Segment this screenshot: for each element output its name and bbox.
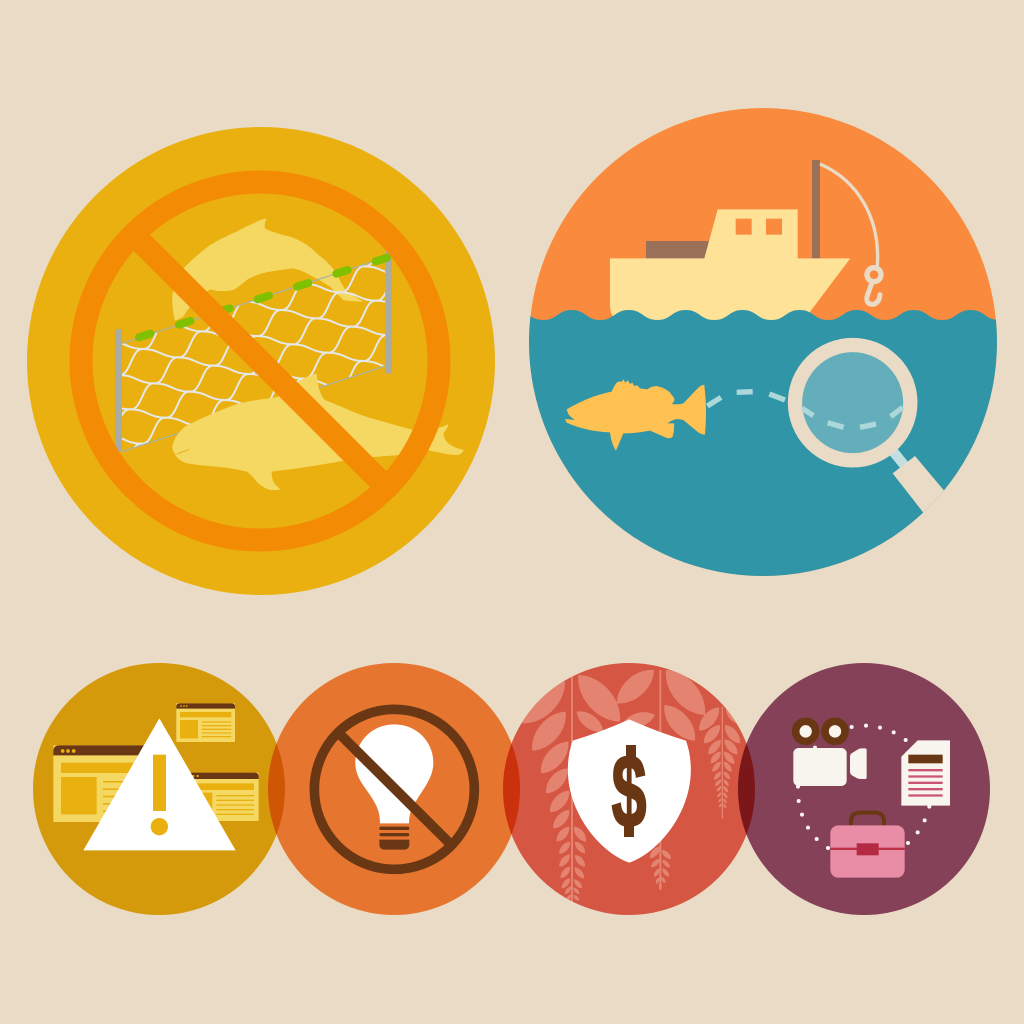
window body bbox=[176, 703, 235, 742]
film reel left bbox=[796, 721, 816, 741]
camera body bbox=[793, 748, 847, 786]
ochre disc bbox=[33, 663, 285, 915]
right post bbox=[385, 250, 392, 373]
prohibition ring bbox=[81, 182, 439, 540]
icon: fish bbox=[565, 379, 706, 451]
panel: financial protection bbox=[503, 663, 746, 915]
orange disc bbox=[268, 663, 520, 915]
window contents bbox=[180, 712, 231, 738]
red disc bbox=[503, 663, 755, 915]
gold disc bbox=[27, 127, 495, 595]
base thread 1 bbox=[379, 827, 409, 830]
cabin window left bbox=[736, 219, 752, 235]
icon: top browser window bbox=[176, 703, 235, 742]
film reel right bbox=[825, 721, 845, 741]
page lines bbox=[908, 769, 943, 797]
icon: exclamation mark bbox=[151, 755, 168, 835]
window contents bbox=[190, 783, 254, 816]
panel: no ideas bbox=[268, 663, 520, 915]
mast bbox=[812, 160, 820, 259]
dolphin mouth line bbox=[177, 450, 189, 454]
clasp bbox=[857, 843, 879, 855]
dollar top bar bbox=[626, 745, 636, 758]
net mesh left bbox=[122, 326, 275, 448]
window contents bbox=[61, 763, 143, 814]
hook eye bbox=[867, 268, 881, 282]
exclamation bar bbox=[153, 755, 166, 811]
icon: lower dolphin bbox=[172, 373, 464, 490]
window dots bbox=[61, 749, 75, 753]
panel: fishing boat and research bbox=[515, 108, 1024, 583]
dollar glyph: $ bbox=[612, 735, 646, 850]
icon: magnifier lens bbox=[795, 345, 910, 460]
prohibition slash bbox=[136, 237, 385, 486]
hull and cabin bbox=[610, 209, 850, 322]
window body bbox=[53, 745, 150, 822]
window header bbox=[53, 745, 150, 755]
left post bbox=[115, 329, 122, 452]
window body bbox=[177, 773, 259, 821]
dotted circle bbox=[796, 724, 931, 850]
overlap left bbox=[738, 744, 755, 834]
icon: bulb base bbox=[379, 827, 409, 850]
page header bbox=[908, 755, 943, 763]
media contents bbox=[793, 721, 950, 878]
net mesh right bbox=[232, 262, 386, 386]
icon: video camera bbox=[793, 721, 867, 786]
wheat contents bbox=[513, 662, 744, 902]
line bbox=[820, 164, 878, 267]
dollar sign bbox=[612, 735, 646, 850]
window header bbox=[176, 703, 235, 709]
window header bbox=[177, 773, 259, 779]
icon: magnifier handle bbox=[892, 456, 944, 512]
net bbox=[111, 170, 460, 550]
page bbox=[901, 740, 950, 806]
overlap left bbox=[268, 744, 285, 834]
sky disc bbox=[529, 108, 997, 576]
bulb contents bbox=[314, 709, 474, 869]
panel: media and portfolio bbox=[738, 663, 990, 915]
prohibition slash bbox=[340, 734, 448, 842]
icon: magnifier handle connector bbox=[893, 452, 905, 466]
cabin window right bbox=[766, 219, 782, 235]
icon: right browser window bbox=[177, 773, 259, 821]
scene contents bbox=[515, 160, 1024, 583]
stalks bbox=[571, 670, 723, 902]
plum disc bbox=[738, 663, 990, 915]
icon: boat bbox=[610, 160, 850, 322]
exclamation dot bbox=[151, 818, 168, 835]
right stalk leaves bbox=[699, 708, 740, 818]
dollar bottom bar bbox=[624, 823, 634, 837]
deck box bbox=[646, 241, 709, 259]
scene: dolphins and net bbox=[111, 170, 464, 550]
base cap bbox=[379, 840, 409, 850]
window dots bbox=[180, 705, 187, 707]
panel: no dolphin bycatch bbox=[27, 127, 495, 595]
left stalk leaves bbox=[522, 675, 620, 900]
window dots bbox=[192, 775, 199, 777]
base thread 2 bbox=[379, 833, 409, 836]
green floats bbox=[139, 258, 387, 337]
fish path dashes bbox=[707, 392, 903, 427]
case body bbox=[830, 825, 905, 878]
warning contents bbox=[53, 703, 259, 850]
water with waves bbox=[529, 310, 997, 576]
top and bottom ropes bbox=[120, 257, 388, 452]
prohibition ring bbox=[314, 709, 474, 869]
centre stalk leaves bbox=[610, 662, 714, 890]
strap bbox=[830, 848, 905, 850]
hook bbox=[867, 283, 880, 304]
handle bbox=[851, 813, 884, 827]
icon: shield bbox=[568, 719, 691, 863]
icon: warning triangle bbox=[83, 718, 236, 850]
infographic canvas bbox=[27, 108, 997, 915]
icon: fishing line and hook bbox=[820, 164, 881, 304]
icon: large browser window bbox=[53, 745, 150, 822]
overlap left bbox=[503, 744, 520, 834]
panel: warning websites bbox=[33, 663, 285, 915]
icon: light bulb bbox=[355, 724, 433, 823]
icon: briefcase bbox=[830, 813, 905, 878]
icon: upper dolphin bbox=[172, 218, 363, 321]
icon: document bbox=[901, 740, 950, 806]
wheat scaled bbox=[513, 662, 744, 902]
camera lens bbox=[850, 748, 867, 779]
